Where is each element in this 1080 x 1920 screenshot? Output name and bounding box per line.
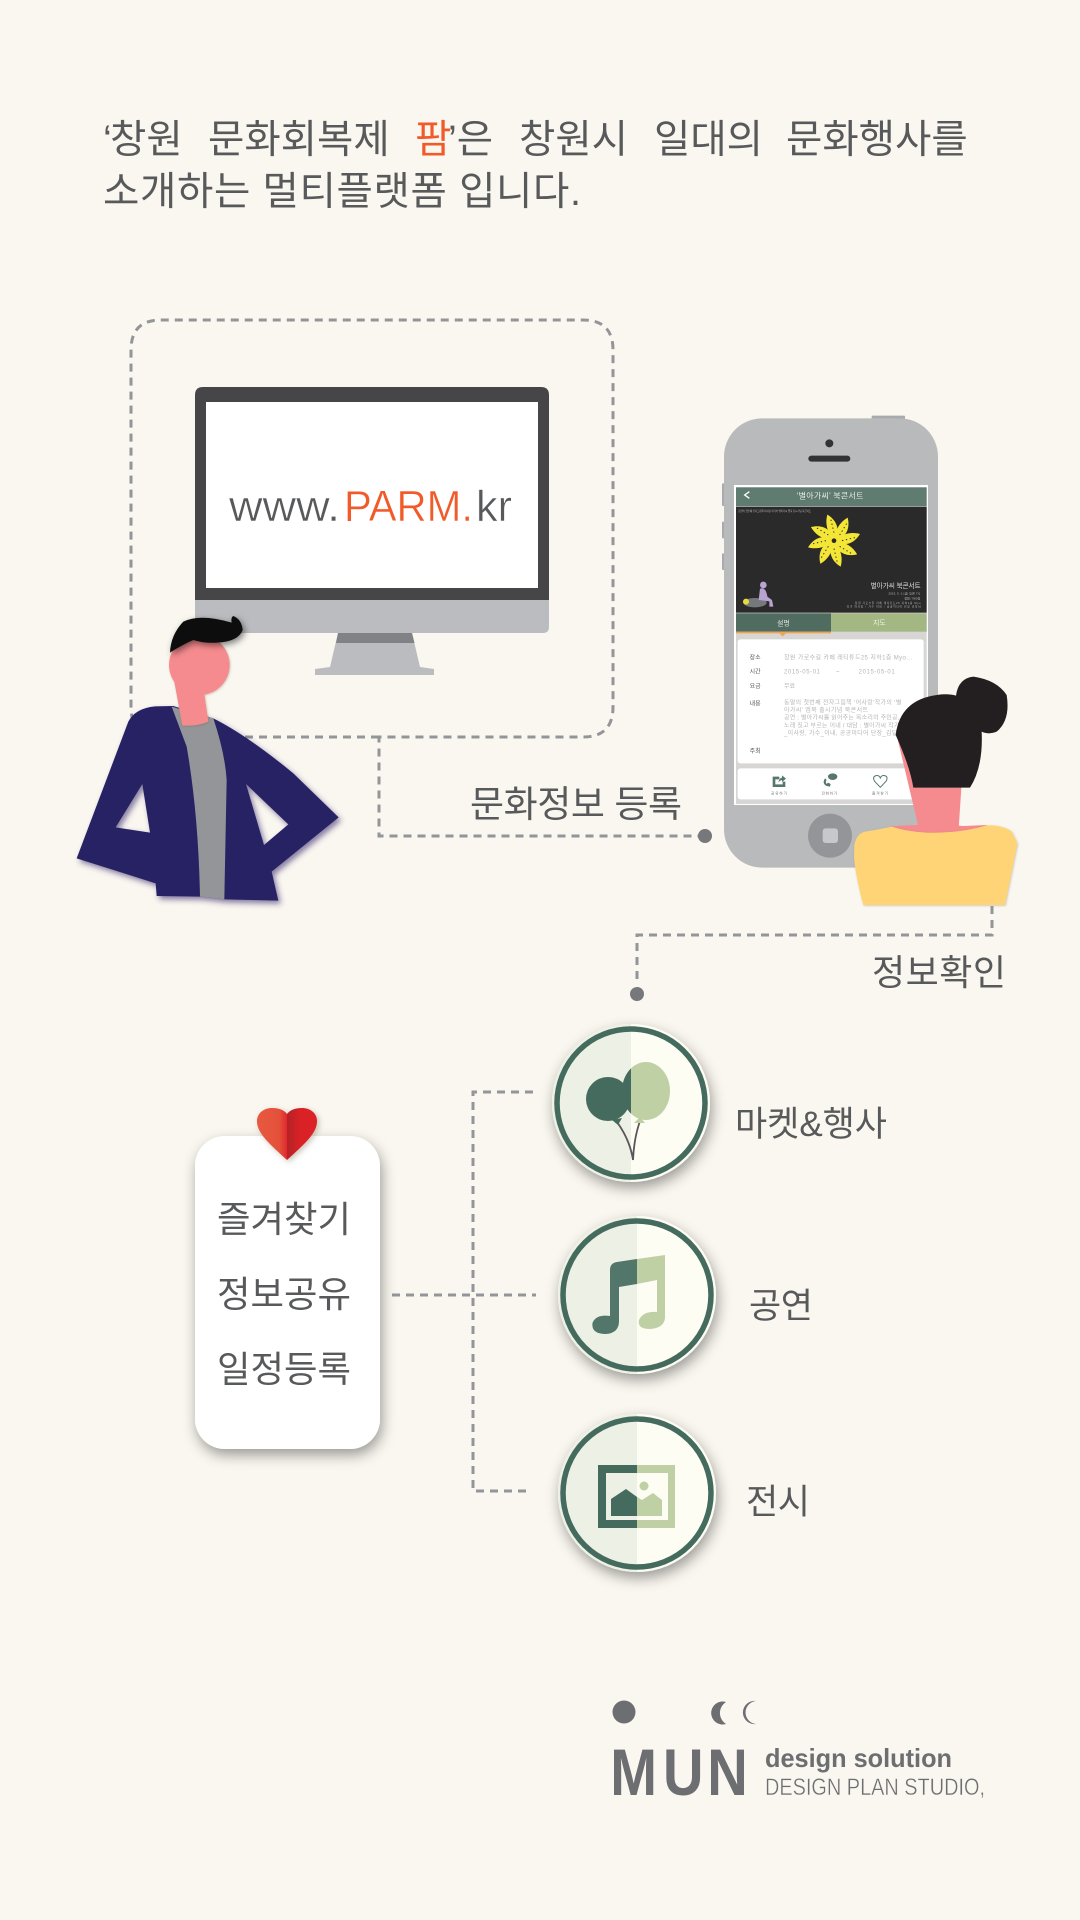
title bbox=[103, 118, 968, 214]
poster image bbox=[736, 507, 927, 613]
icon: music category bbox=[558, 1216, 716, 1374]
title: 창원시 bbox=[519, 118, 628, 162]
mobile phone with app screen: ‘별아가씨’ 북콘서트 bbox=[797, 491, 863, 501]
logo: MUN design solution: N bbox=[707, 1736, 748, 1809]
icon: exhibition category bbox=[558, 1414, 716, 1572]
panel: user features card bbox=[195, 1136, 380, 1449]
logo: MUN design solution: DESIGN PLAN STUDIO, bbox=[765, 1774, 985, 1801]
infographic canvas bbox=[76, 120, 1019, 1798]
title: 소개하는 멀티플랫폼 입니다. bbox=[103, 170, 581, 214]
dashed frame: web registration bbox=[131, 320, 705, 836]
category label: performance: 공연 bbox=[749, 1287, 813, 1326]
mobile phone with app screen: 2015-05-01 bbox=[784, 669, 821, 675]
logo: MUN design solution bbox=[610, 1700, 985, 1809]
connector: woman to categories bbox=[637, 906, 992, 985]
logo: MUN design solution: U bbox=[663, 1736, 704, 1809]
title: ’은 bbox=[448, 118, 493, 162]
mobile phone with app screen: 요금 bbox=[750, 683, 761, 690]
mobile phone with app screen bbox=[722, 416, 938, 868]
website address bbox=[228, 482, 512, 531]
mobile phone with app screen: 아가씨’ 앱북 출시기념 북콘서트 bbox=[784, 706, 868, 714]
feature list: 정보공유 bbox=[217, 1274, 351, 1315]
website address: PARM. bbox=[344, 482, 473, 531]
feature list: 일정등록 bbox=[217, 1349, 351, 1390]
mobile phone with app screen: 2015-05-01 bbox=[859, 669, 895, 675]
website address: kr bbox=[476, 482, 512, 531]
icon: balloons category bbox=[552, 1024, 710, 1182]
mobile phone with app screen: 전화하기 bbox=[822, 791, 837, 796]
mobile phone with app screen: 창원 가로수길 카페 레티튜드25 지하1층 Myo... bbox=[784, 654, 912, 662]
mobile phone with app screen: 노래 짓고 부르는 이내 / 대담 : 별아가씨 작가 bbox=[784, 721, 900, 729]
title: 문화회복제 bbox=[208, 118, 390, 162]
connector dot bbox=[698, 829, 712, 843]
poster image: 창원 / 어사랑 bbox=[904, 596, 921, 601]
mobile phone with app screen: 장소 bbox=[750, 654, 761, 662]
title: 문화행사를 bbox=[786, 118, 968, 162]
figure: man in navy jacket bbox=[77, 616, 339, 901]
mobile phone with app screen: 주최 bbox=[750, 747, 761, 755]
feature list bbox=[217, 1199, 351, 1390]
icon: heart bbox=[257, 1108, 317, 1160]
logo: MUN design solution: design solution bbox=[765, 1743, 952, 1773]
logo: MUN design solution: M bbox=[610, 1736, 657, 1809]
poster image: 동말의 첫번째 전자그림책 어사랑 작가의 별아가씨 앱북 출시기념 북콘서트 bbox=[738, 509, 811, 513]
website address: www. bbox=[228, 482, 340, 531]
mobile phone with app screen: ~ bbox=[836, 669, 840, 675]
feature list: 즐겨찾기 bbox=[217, 1199, 351, 1240]
mobile phone with app screen: 무료 bbox=[784, 683, 796, 690]
label: culture info registration: 문화정보 등록 bbox=[470, 784, 682, 825]
mobile phone with app screen: 즐겨찾기 bbox=[872, 791, 888, 796]
title: 창원 bbox=[110, 118, 183, 162]
poster image: 작가 어사랑 / 가수 이내 / 공공미디어 단장 김달님 bbox=[847, 605, 921, 609]
mobile phone with app screen: 지도 bbox=[873, 618, 886, 627]
title: 일대의 bbox=[654, 118, 763, 162]
mobile phone with app screen: _이사랑, 가수_이내, 공공미디어 단장_김달 bbox=[783, 729, 898, 737]
poster image: 창원 가로수길 카페 레티튜드25 지하1층 Myo bbox=[855, 601, 921, 605]
mobile phone with app screen: 공유하기 bbox=[771, 791, 787, 796]
mobile phone with app screen: 동말의 첫번째 전자그림책 ‘어사랑’작가의 ‘별 bbox=[784, 698, 901, 706]
icon: desktop monitor bbox=[195, 387, 549, 675]
mobile phone with app screen: 설명 bbox=[777, 618, 790, 627]
title: ‘ bbox=[103, 118, 112, 162]
label: info check: 정보확인 bbox=[872, 952, 1006, 993]
mobile phone with app screen: 시간 bbox=[750, 667, 761, 675]
category label: market: 마켓&행사 bbox=[735, 1105, 887, 1144]
poster image: 별아가씨 북콘서트 bbox=[871, 581, 921, 590]
poster image: 2015. 5. 1 (금) 늦은 7시 bbox=[888, 591, 921, 596]
connector dot bbox=[630, 987, 644, 1001]
connector: card to categories bbox=[392, 1092, 536, 1491]
mobile phone with app screen: 공연 : 별아가씨를 읽어주는 목소리의 주인공, bbox=[784, 714, 900, 722]
mobile phone with app screen: 내용 bbox=[750, 700, 761, 708]
category label: exhibition: 전시 bbox=[746, 1483, 810, 1522]
title: 팜 bbox=[415, 118, 451, 162]
figure: woman with yellow top bbox=[854, 677, 1017, 905]
